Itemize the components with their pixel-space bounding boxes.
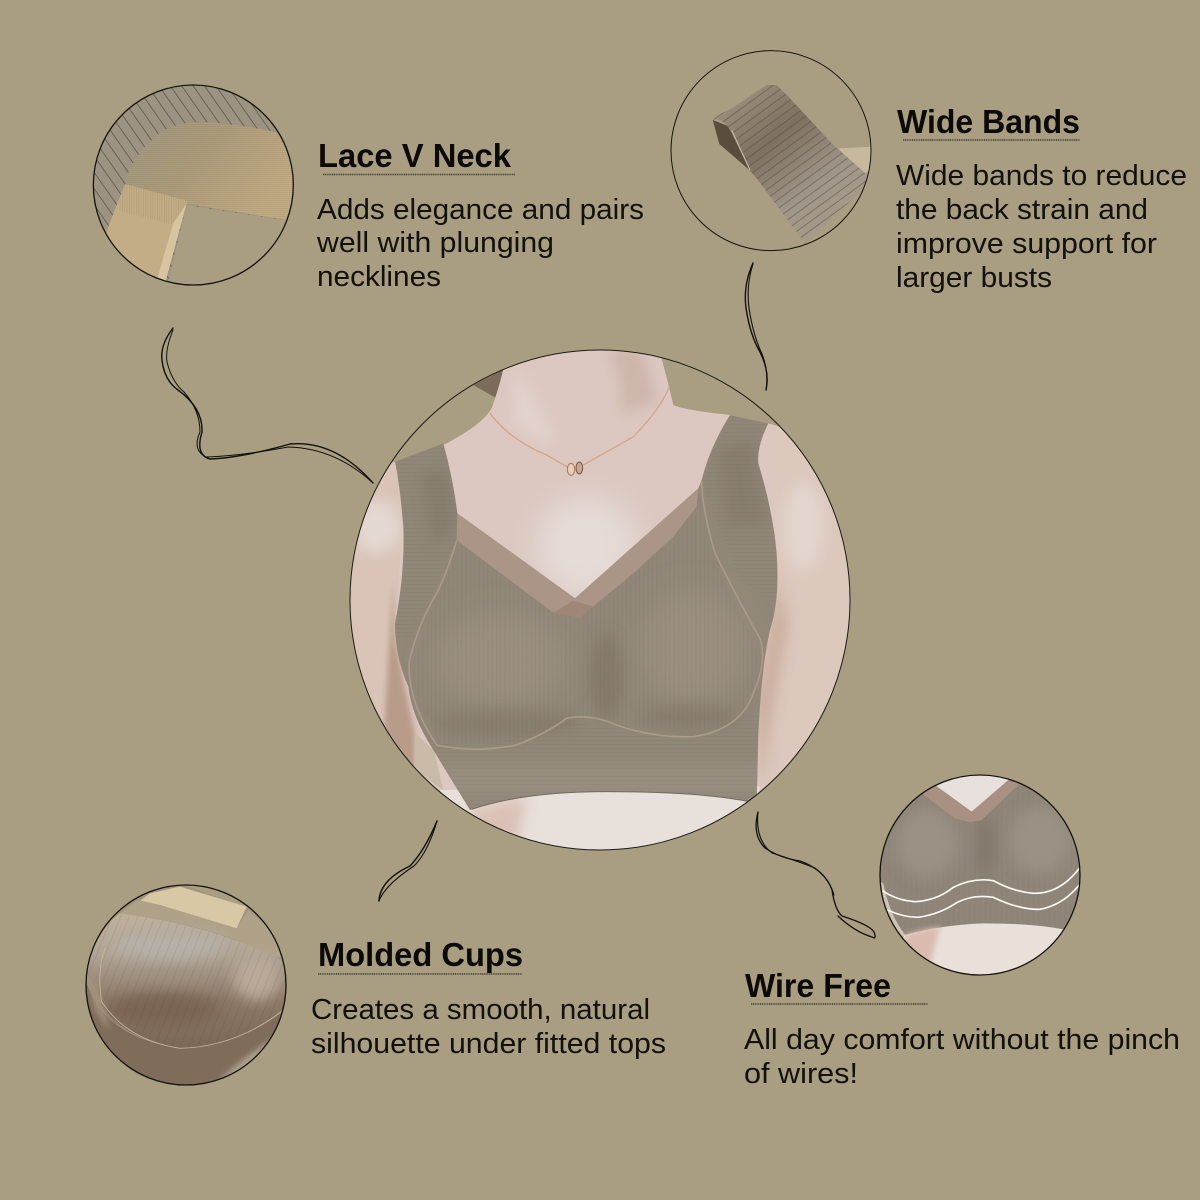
heading: Molded Cups: [318, 936, 523, 973]
arm and chest shading: [340, 347, 860, 860]
heading: Wire Free: [745, 967, 891, 1004]
lace V neckline: [457, 488, 698, 617]
text block: [896, 160, 1187, 294]
pendant: [567, 462, 583, 475]
text block: Wide bands to reduce: [896, 160, 1187, 192]
cup seam: [409, 482, 763, 749]
panel: Wide Bands: [671, 51, 1187, 294]
icon: molded cup close-up: [83, 883, 290, 1090]
wire lines: [883, 867, 1080, 917]
text block: [744, 1024, 1180, 1090]
panel: Lace V Neck: [90, 80, 644, 293]
text block: Creates a smooth, natural: [311, 994, 650, 1026]
bra body: [395, 415, 777, 810]
icon: wide band close-up: [671, 51, 872, 251]
text block: of wires!: [744, 1058, 858, 1090]
central photo: woman wearing bra: [340, 340, 860, 860]
arrow: Molded Cups connector: [379, 821, 437, 901]
arrow: Wide Bands connector: [745, 263, 767, 390]
heading: Wide Bands: [897, 103, 1080, 140]
arrow: Wire Free connector: [756, 812, 875, 938]
skin: [392, 350, 785, 793]
panel: Wire Free: [744, 772, 1180, 1090]
text block: well with plunging: [316, 227, 554, 259]
arrow: Lace V Neck connector: [162, 328, 373, 483]
text block: [316, 194, 644, 293]
text block: All day comfort without the pinch: [744, 1024, 1180, 1056]
text block: [311, 994, 666, 1060]
necklace: [490, 387, 669, 468]
hair: [474, 370, 503, 398]
heading: Lace V Neck: [318, 137, 512, 174]
icon: wire free close-up: [877, 772, 1083, 978]
text block: silhouette under fitted tops: [311, 1028, 666, 1060]
text block: Adds elegance and pairs: [317, 194, 644, 226]
text block: larger busts: [896, 262, 1052, 294]
text block: the back strain and: [896, 194, 1148, 226]
text block: necklines: [317, 261, 441, 293]
icon: lace neckline close-up: [90, 80, 297, 287]
bra shading and rib texture: [395, 415, 780, 813]
panel: Molded Cups: [83, 883, 666, 1090]
text block: improve support for: [896, 228, 1157, 260]
